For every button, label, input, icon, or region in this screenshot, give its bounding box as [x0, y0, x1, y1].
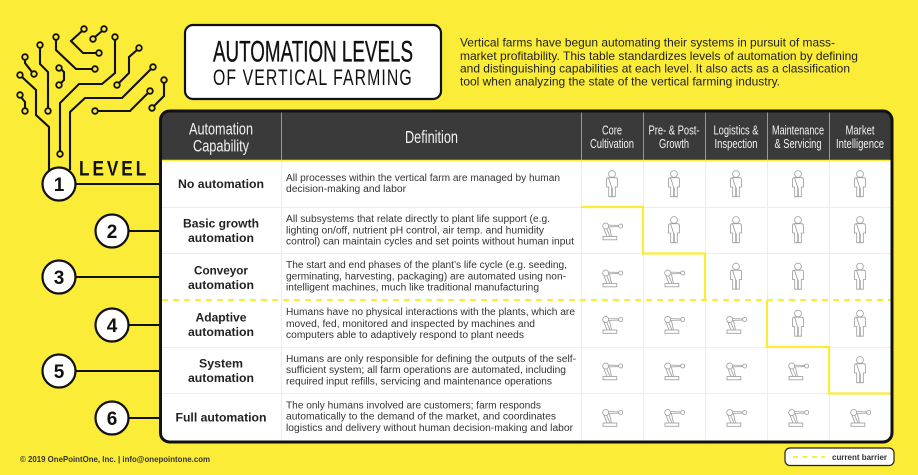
intro paragraph: and distinguishing capabilities at each level. It also acts as a classification [460, 62, 850, 76]
definitions: The start and end phases of the plant’s life cycle (e.g. seeding, [286, 260, 567, 271]
definitions: computers able to adaptively respond to plant needs [286, 330, 524, 341]
table header labels: Pre- & Post- [648, 122, 700, 138]
intro paragraph [460, 36, 858, 88]
footer credit: © 2019 OnePointOne, Inc. | info@onepointone.com [20, 455, 210, 464]
table header labels: Cultivation [590, 136, 634, 151]
definitions: automatically to the demand of the market, and coordinates [286, 412, 556, 422]
definitions: moved, fed, monitored and inspected by machines and [286, 319, 535, 330]
definitions: decision-making and labor [286, 184, 407, 195]
table header labels: Growth [659, 136, 689, 151]
capability names [176, 177, 266, 424]
capability names: Basic growth [183, 216, 259, 230]
capability names: automation [188, 278, 254, 292]
label: LEVEL: LEVEL [79, 157, 146, 181]
definitions: All subsystems that relate directly to plant life support (e.g. [286, 214, 550, 225]
level badges [42, 168, 128, 434]
intro paragraph: Vertical farms have begun automating their systems in pursuit of mass- [460, 36, 835, 50]
intro paragraph: market profitability. This table standardizes levels of automation by defining [460, 50, 858, 63]
title box: AUTOMATION LEVELS [213, 36, 413, 68]
table header labels [189, 120, 884, 156]
level badges: 1 [54, 175, 65, 196]
table border [160, 111, 892, 442]
definitions: All processes within the vertical farm are managed by human [286, 173, 560, 184]
definitions: sufficient system; all farm operations are automated, including [286, 365, 566, 376]
level badges: 4 [107, 316, 118, 337]
definitions: germinating, harvesting, packaging) are automated using non- [286, 272, 566, 282]
definitions [286, 173, 576, 434]
definitions: control) can maintain cycles and set points without human input [286, 236, 574, 248]
level badges: 2 [107, 222, 117, 243]
level badges: 6 [107, 409, 117, 430]
title box: OF VERTICAL FARMING [213, 67, 412, 91]
legend [785, 448, 894, 466]
barrier lines [162, 207, 891, 394]
definitions: intelligent machines, much like traditional manufacturing [286, 282, 539, 294]
definitions: The only humans involved are customers; farm responds [286, 400, 541, 412]
definitions: logistics and delivery without human decision-making and labor [286, 423, 574, 434]
table header labels: Intelligence [836, 136, 884, 151]
table panel [160, 111, 892, 442]
icon: circuit tree [17, 26, 167, 170]
level connector lines [59, 184, 162, 418]
table header labels: Capability [193, 138, 250, 156]
capability names: automation [188, 231, 254, 245]
level badges: 3 [54, 268, 64, 289]
capability names: Full automation [176, 410, 266, 424]
table header labels: Automation [189, 120, 253, 138]
table header labels: Inspection [714, 136, 758, 151]
table header labels: Logistics & [714, 122, 759, 138]
definitions: required input refills, servicing and maintenance operations [286, 376, 552, 388]
capability names: automation [188, 371, 254, 385]
definitions: lighting on/off, nutrient pH control, air temp. and humidity [286, 226, 544, 236]
capability names: Conveyor [194, 264, 248, 278]
icons: robots [603, 223, 871, 426]
intro paragraph: tool when analyzing the state of the vertical farming industry. [460, 76, 780, 88]
level badges: 5 [54, 362, 65, 383]
capability names: automation [188, 325, 254, 339]
definitions: Humans have no physical interactions with the plants, which are [286, 307, 575, 318]
table header labels: Maintenance [772, 122, 824, 138]
definitions: Humans are only responsible for defining the outputs of the self- [286, 354, 576, 365]
table header labels: Market [846, 122, 875, 138]
title box [185, 25, 441, 99]
capability names: No automation [178, 177, 264, 191]
table header labels: Core [602, 122, 622, 138]
table header labels: & Servicing [774, 136, 822, 151]
capability names: System [199, 356, 243, 370]
capability names: Adaptive [196, 310, 247, 324]
table header labels: Definition [405, 127, 458, 147]
icons: humans [606, 171, 866, 383]
legend: current barrier [832, 453, 888, 462]
